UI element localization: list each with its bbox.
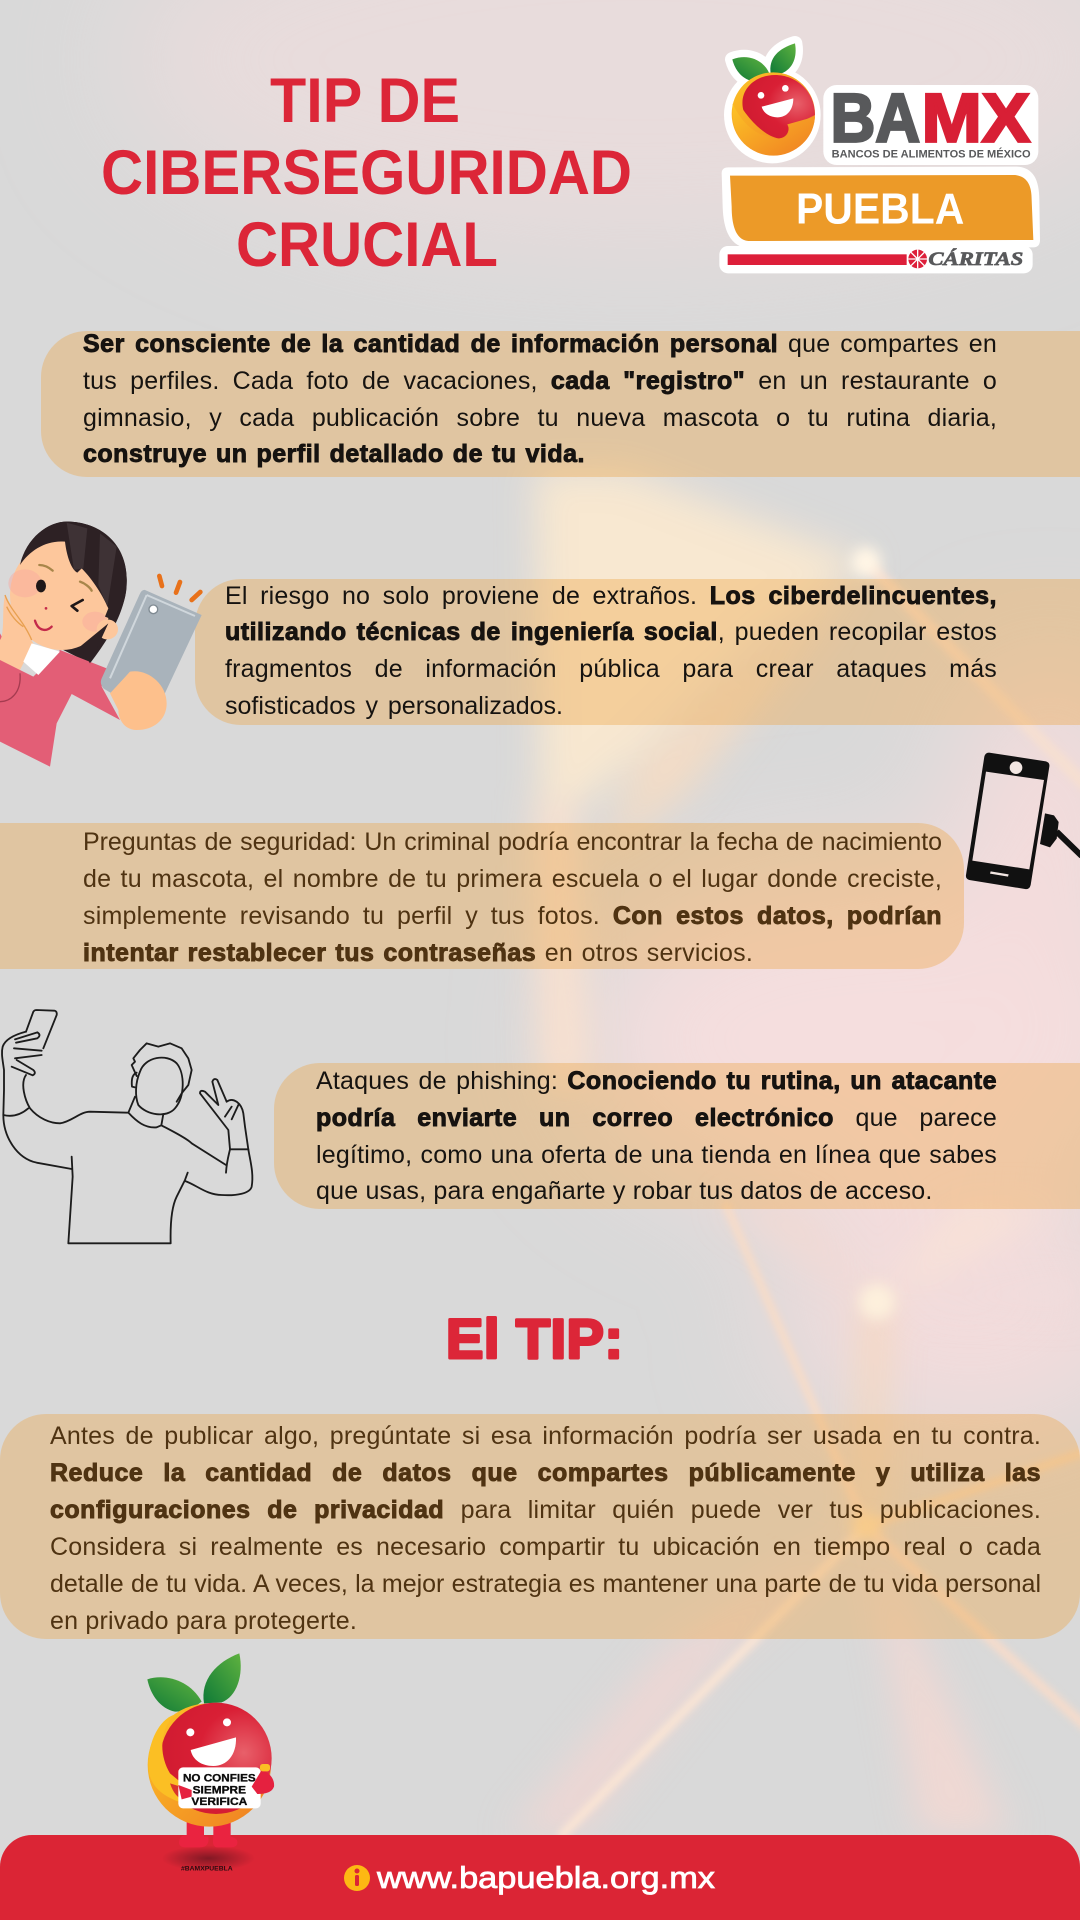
logo Puebla banner: PUEBLA [796, 185, 964, 233]
panel: the tip: Reduce la cantidad de datos que compartes públicamente y utiliza las [50, 1459, 1041, 1487]
panel: social engineering risk: utilizando técnicas de ingeniería social, pueden recopilar estos [225, 618, 997, 646]
panel: the tip: en privado para protegerte. [50, 1607, 357, 1635]
panel: security questions: Preguntas de seguridad: Un criminal podría encontrar la fecha de nacimiento [83, 828, 942, 856]
logo wordmark [823, 80, 1038, 165]
logo apple sticker [724, 43, 821, 163]
heading: El TIP: El TIP: [446, 1307, 623, 1370]
icon: info circle [344, 1865, 370, 1891]
icon: phone on selfie stick [966, 753, 1080, 889]
panel: the tip: Considera si realmente es necesario compartir tu ubicación en tiempo real o cada [50, 1533, 1041, 1561]
mascot: no confies siempre verifica: #BAMXPUEBLA [181, 1867, 233, 1873]
panel: personal information: gimnasio, y cada publicación sobre tu nueva mascota o tu rutina diaria, [83, 404, 997, 432]
footer url: www.bapuebla.org.mx [376, 1860, 716, 1895]
panel: security questions [0, 823, 964, 969]
title: CRUCIAL [236, 210, 498, 280]
panel: the tip: configuraciones de privacidad para limitar quién puede ver tus publicaciones. [50, 1496, 1041, 1524]
mascot: no confies siempre verifica: NO CONFIES [183, 1773, 256, 1785]
panel: phishing attacks: Ataques de phishing: Conociendo tu rutina, un atacante [316, 1067, 997, 1095]
panel: the tip: Antes de publicar algo, pregúntate si esa información podría ser usada en tu contra. [50, 1422, 1041, 1450]
panel: the tip: detalle de tu vida. A veces, la mejor estrategia es mantener una parte de tu vida personal [50, 1570, 1041, 1598]
logo: BAMX Puebla [719, 43, 1040, 273]
title: TIP DE [270, 66, 460, 136]
panel: social engineering risk: fragmentos de información pública para crear ataques más [225, 655, 997, 683]
panel: social engineering risk: sofisticados y personalizados. [225, 692, 563, 720]
panel: personal information: Ser consciente de la cantidad de información personal que compartes en [83, 330, 997, 358]
mascot: no confies siempre verifica [147, 1653, 274, 1873]
mascot: no confies siempre verifica: SIEMPRE [193, 1784, 246, 1796]
panel: personal information: tus perfiles. Cada foto de vacaciones, cada "registro" en un restaurante o [83, 367, 997, 395]
panel: social engineering risk: El riesgo no solo proviene de extraños. Los ciberdelincuentes, [225, 582, 997, 610]
panel: security questions: de tu mascota, el nombre de tu primera escuela o el lugar donde creciste, [83, 865, 942, 893]
panel: social engineering risk [195, 579, 1080, 725]
panel: security questions: simplemente revisando tu perfil y tus fotos. Con estos datos, podrían [83, 902, 942, 930]
panel: the tip [0, 1414, 1080, 1639]
logo Puebla banner [722, 167, 1040, 249]
icon: woman taking selfie [0, 522, 202, 767]
panel: phishing attacks: podría enviarte un correo electrónico que parece [316, 1104, 997, 1132]
logo Caritas bar: CÁRITAS [928, 248, 1023, 270]
footer bar [0, 1835, 1080, 1920]
icon: man line drawing taking selfie [2, 1010, 252, 1243]
panel: phishing attacks: que usas, para engañarte y robar tus datos de acceso. [316, 1177, 933, 1205]
panel: phishing attacks: legítimo, como una oferta de una tienda en línea que sabes [316, 1141, 997, 1169]
title: CIBERSEGURIDAD [101, 138, 632, 208]
logo Caritas bar [719, 246, 1033, 273]
panel: phishing attacks [274, 1063, 1080, 1209]
panel: personal information: construye un perfil detallado de tu vida. [83, 440, 585, 468]
logo wordmark: BA [831, 80, 920, 157]
panel: security questions: intentar restablecer tus contraseñas en otros servicios. [83, 939, 753, 967]
logo wordmark: BANCOS DE ALIMENTOS DE MÉXICO [832, 148, 1031, 161]
mascot: no confies siempre verifica: VERIFICA [191, 1796, 247, 1808]
logo wordmark: MX [922, 80, 1030, 157]
panel: personal information [41, 331, 1080, 477]
